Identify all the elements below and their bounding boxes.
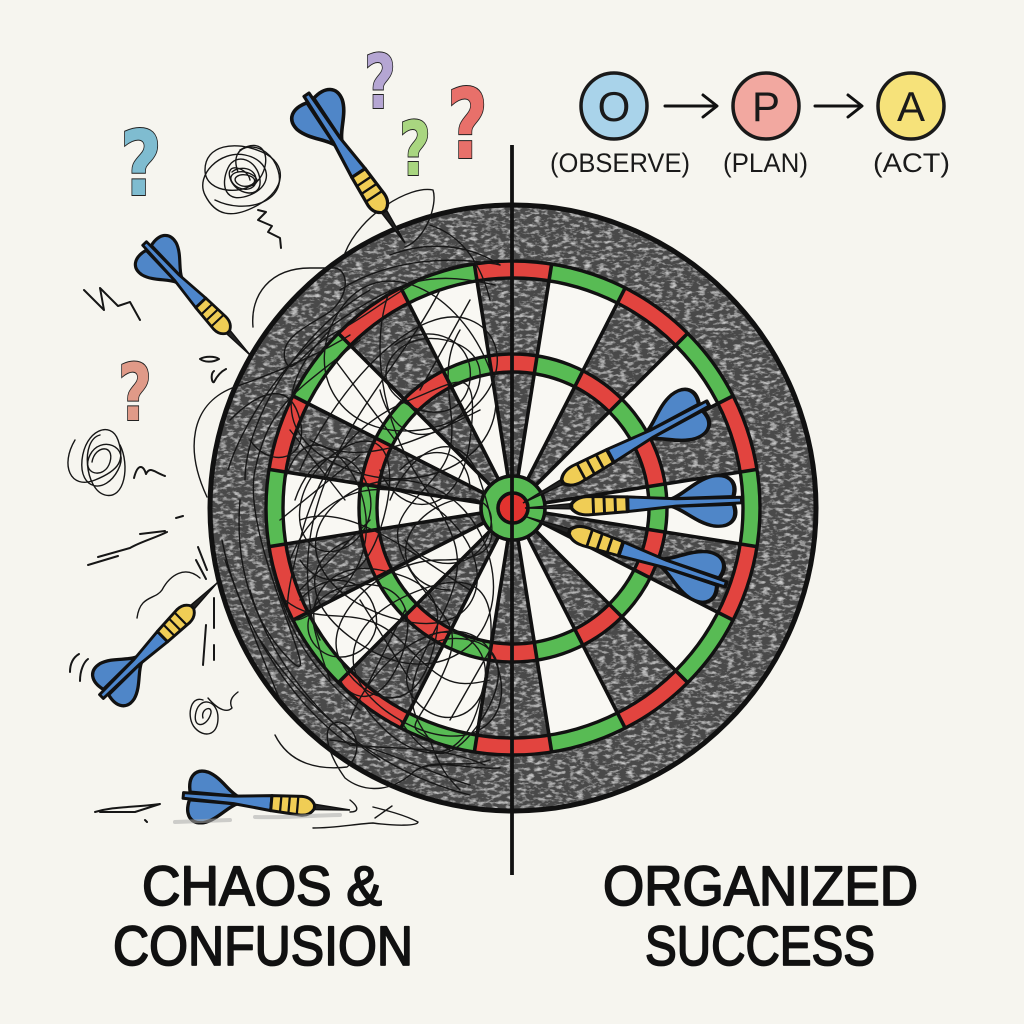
question marks: ? <box>447 68 488 181</box>
step: plan <box>723 73 808 178</box>
scribble knot: top <box>203 145 280 214</box>
impact marks near upper-left dart <box>200 357 226 382</box>
step: plan: P <box>752 83 780 130</box>
dart: bullseye lower <box>519 493 734 608</box>
step: observe <box>550 73 690 178</box>
ground marks under fallen dart <box>95 800 418 828</box>
heading: Organized Success: ORGANIZED <box>603 854 918 917</box>
red ring segments <box>266 261 760 755</box>
dart: bullseye upper <box>511 381 720 525</box>
panel: dartboard <box>210 205 816 811</box>
dart: stuck in top of the rim <box>284 80 428 258</box>
scribble knot: left <box>68 430 125 495</box>
heading: Organized Success: SUCCESS <box>645 914 875 977</box>
question marks: ? <box>364 38 396 126</box>
spider wires <box>269 264 757 752</box>
step: observe: O <box>598 83 630 130</box>
dart: bullseye middle <box>524 475 743 533</box>
step: act: (ACT) <box>873 148 950 178</box>
squiggle: under top knot <box>258 210 281 248</box>
white board face <box>266 261 760 755</box>
squiggle: beside left knot <box>134 467 165 478</box>
heading: Organized Success <box>603 854 918 977</box>
heading: Chaos & Confusion <box>113 854 413 977</box>
spiral scribble <box>190 692 238 734</box>
step: plan: (PLAN) <box>723 148 808 178</box>
step: act: A <box>897 83 925 130</box>
dark wedges <box>283 278 743 738</box>
dart: fallen on the floor <box>181 770 352 836</box>
motion arcs behind lower-left dart <box>70 654 88 681</box>
ring outlines <box>210 205 816 811</box>
question marks: ? <box>118 349 152 439</box>
step: observe: (OBSERVE) <box>550 148 690 178</box>
question marks: ? <box>399 105 431 193</box>
OPA process diagram <box>550 73 950 178</box>
arrow: plan to act <box>815 95 862 117</box>
heading: Chaos & Confusion: CONFUSION <box>113 914 413 977</box>
arrow: observe to plan <box>665 95 717 117</box>
scribbles over the left half of the board <box>194 189 502 795</box>
dart: bouncing off lower-left rim <box>84 565 235 714</box>
vertical divider line <box>510 145 514 875</box>
dart: stuck in upper-left rim <box>127 227 268 372</box>
step: act <box>873 73 950 178</box>
outer charcoal ring <box>210 205 816 811</box>
impact lines and squiggle near lower-left dart <box>196 547 214 665</box>
lightning squiggle <box>84 288 140 320</box>
speed lines <box>88 516 183 565</box>
question marks: ? <box>120 112 162 217</box>
bullseye <box>481 476 545 540</box>
question marks <box>118 38 488 439</box>
heading: Chaos & Confusion: CHAOS & <box>142 854 382 917</box>
green ring segments <box>266 261 760 755</box>
